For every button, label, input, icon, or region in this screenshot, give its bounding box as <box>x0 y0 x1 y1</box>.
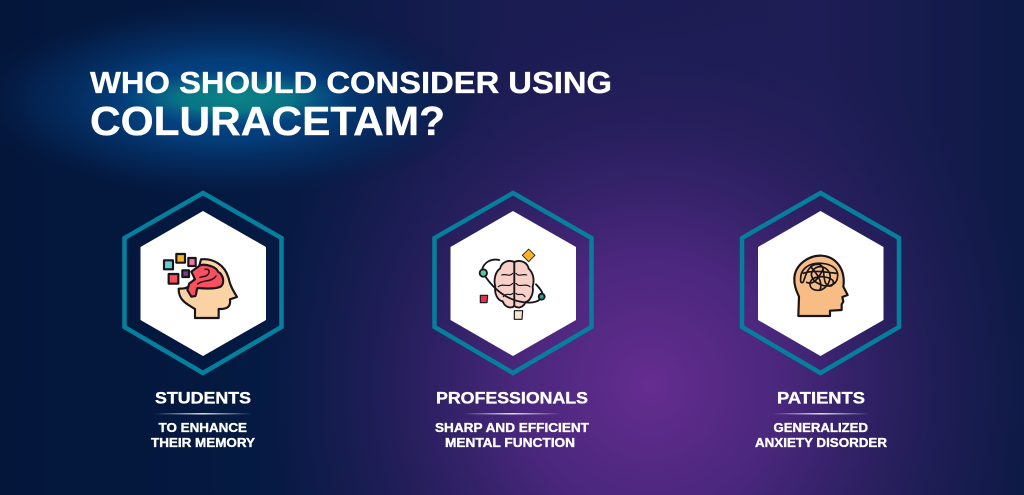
heading block: patients: GENERALIZED <box>774 421 868 435</box>
heading block: students <box>151 390 256 450</box>
heading block: professionals: SHARP AND EFFICIENT <box>435 421 589 435</box>
panel: students <box>124 193 282 373</box>
panel: professionals <box>434 193 592 373</box>
panel: patients <box>742 193 899 373</box>
hexagon frame: professionals <box>434 193 592 373</box>
heading block: professionals <box>435 390 589 450</box>
hexagon: students <box>140 211 266 356</box>
heading block: patients: ANXIETY DISORDER <box>755 436 887 450</box>
hexagon: professionals <box>450 211 576 356</box>
heading block: students: TO ENHANCE <box>158 421 247 435</box>
heading block: professionals: MENTAL FUNCTION <box>445 436 575 450</box>
hexagon frame: patients <box>742 193 899 373</box>
heading block: patients: PATIENTS <box>777 390 865 408</box>
title: WHO SHOULD CONSIDER USING <box>90 66 612 100</box>
icon: brain with orbits <box>480 249 545 319</box>
heading block: students: STUDENTS <box>155 390 251 408</box>
hexagon frame: students <box>124 193 282 373</box>
icon: head with brain and memory blocks <box>164 254 237 318</box>
heading block: students: THEIR MEMORY <box>151 436 256 450</box>
title: COLURACETAM? <box>90 98 445 144</box>
icon: head with tangled thoughts <box>794 256 848 316</box>
heading block: patients <box>755 390 887 450</box>
title <box>90 66 612 144</box>
heading block: professionals: PROFESSIONALS <box>436 390 588 408</box>
hexagon: patients <box>758 211 884 356</box>
